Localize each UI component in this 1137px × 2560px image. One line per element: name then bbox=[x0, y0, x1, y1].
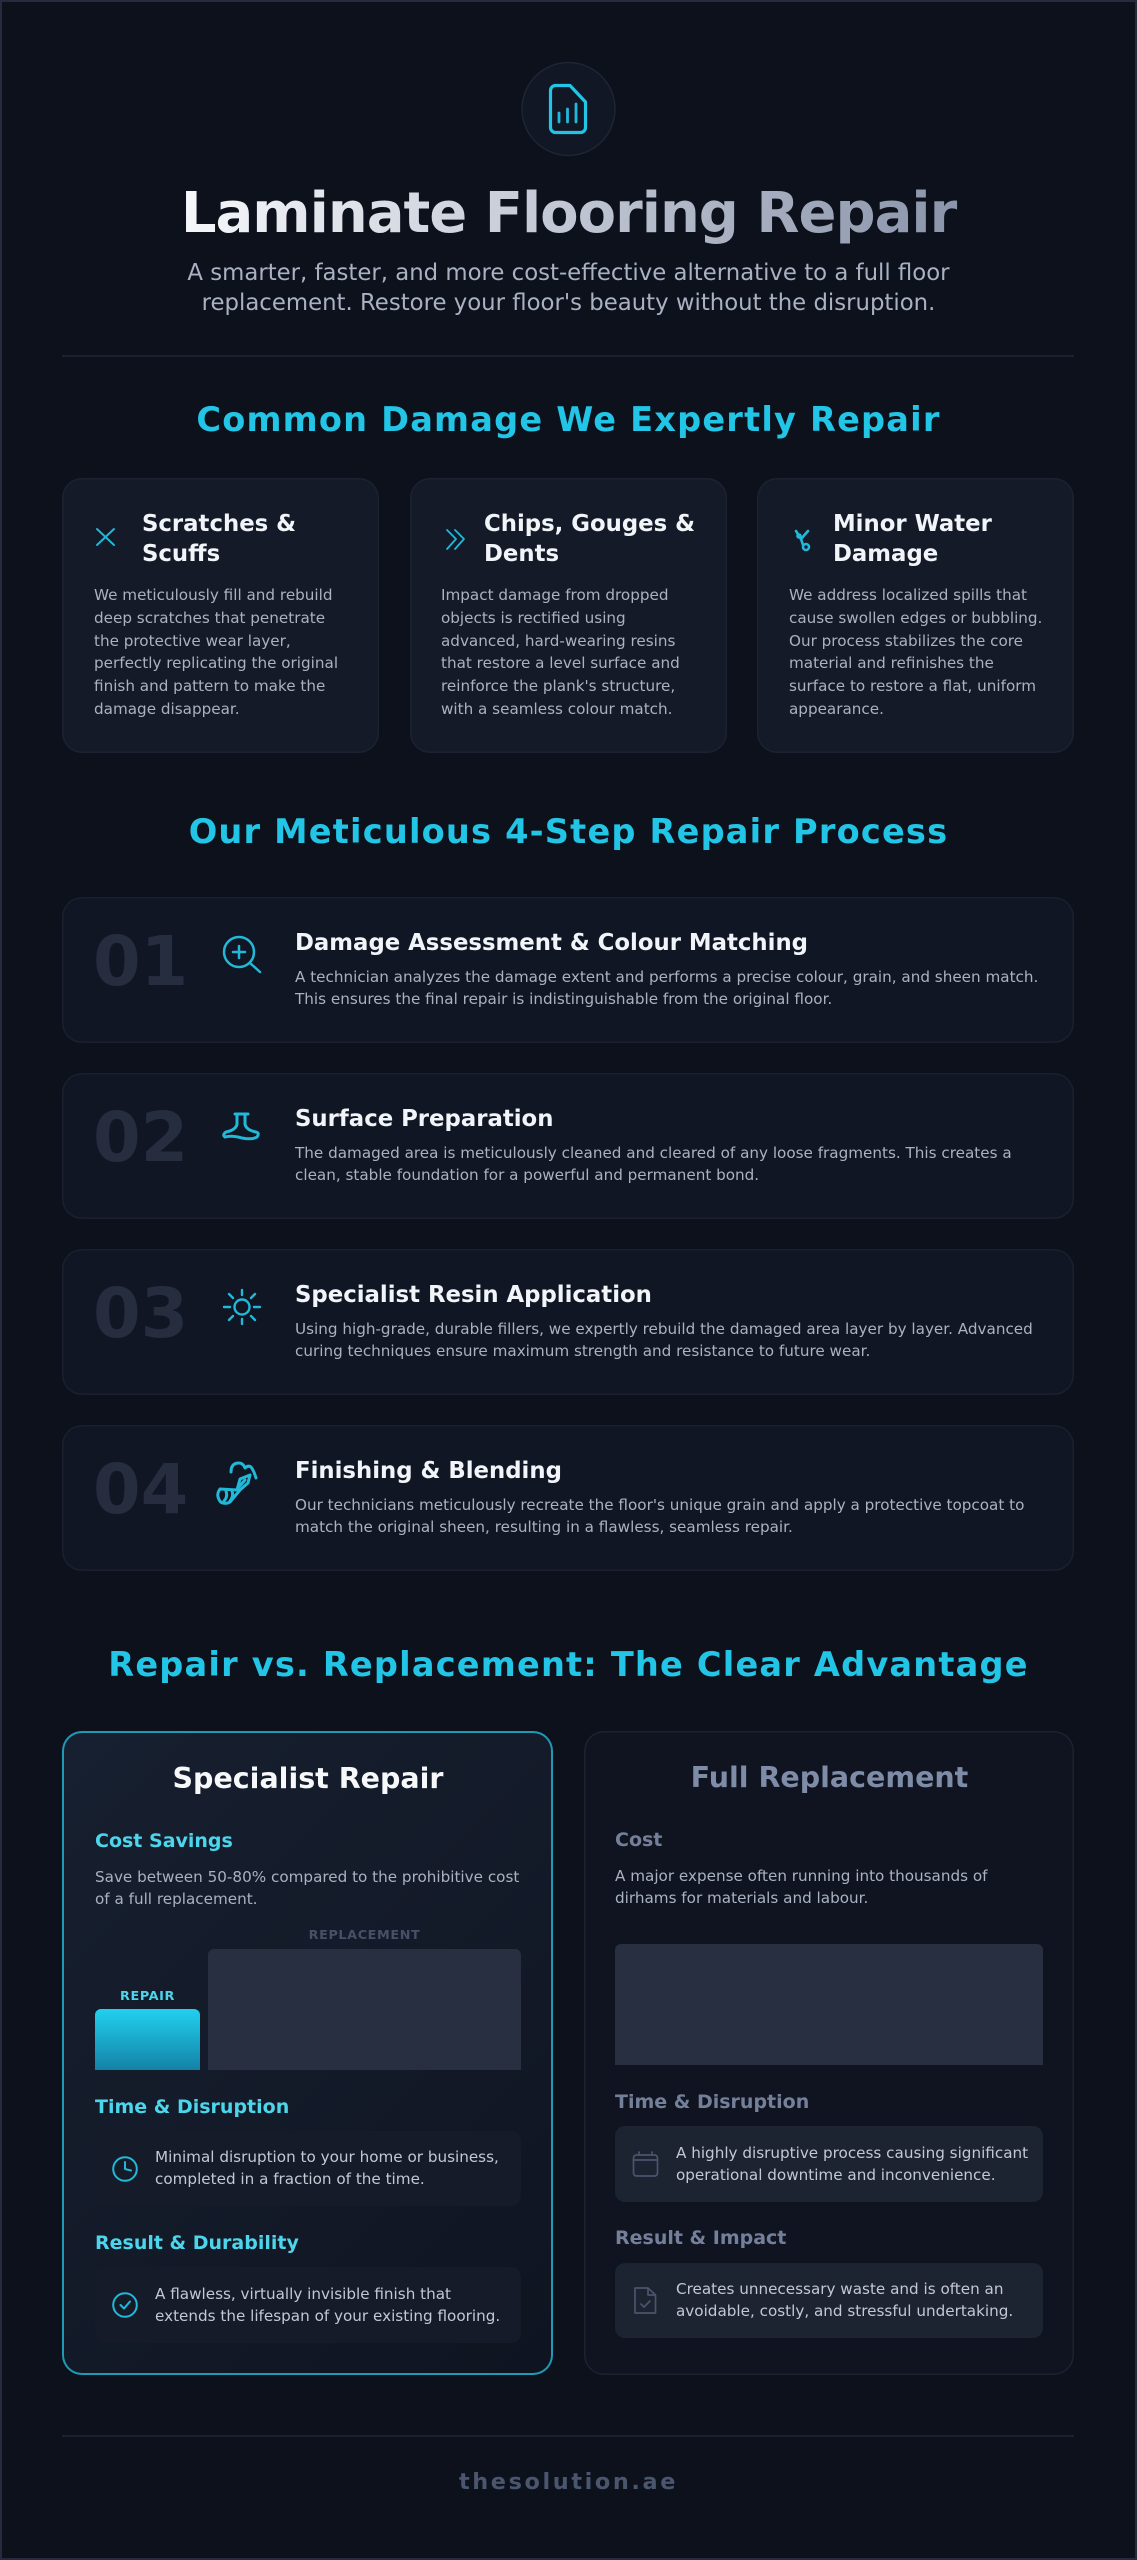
title bbox=[0, 181, 1137, 246]
cost text: A major expense often running into thousands of bbox=[615, 1867, 988, 1885]
card text: We address localized spills that bbox=[789, 586, 1027, 604]
card title: Dents bbox=[484, 541, 559, 567]
step text: Using high-grade, durable fillers, we expertly rebuild the damaged area layer by layer. Advanced bbox=[295, 1320, 1033, 1338]
subheading: time and disruption: Time & Disruption bbox=[95, 2096, 289, 2118]
icon: double chevron bbox=[446, 529, 465, 550]
card title: Scuffs bbox=[142, 541, 220, 567]
card text: We meticulously fill and rebuild bbox=[94, 586, 333, 604]
step text: A technician analyzes the damage extent and performs a precise colour, grain, and sheen match. bbox=[295, 968, 1038, 986]
step text bbox=[294, 1144, 1012, 1184]
panel title: Full Replacement bbox=[691, 1761, 968, 1794]
panel title: Specialist Repair bbox=[173, 1762, 443, 1795]
panel: step 2 bbox=[62, 1073, 1074, 1219]
subheading: time and disruption: Time & Disruption bbox=[615, 2091, 809, 2113]
card text: material and refinishes the bbox=[789, 654, 994, 672]
subheading: cost: Cost bbox=[615, 1829, 662, 1851]
step text bbox=[295, 1320, 1033, 1360]
panel: scratches and scuffs bbox=[62, 478, 379, 753]
card text: surface to restore a flat, uniform bbox=[789, 677, 1036, 695]
step number: 01 bbox=[93, 923, 188, 1002]
bar chart: repair vs replacement bbox=[95, 1928, 521, 2070]
card text: Impact damage from dropped bbox=[441, 586, 668, 604]
step title: Surface Preparation bbox=[295, 1106, 553, 1132]
step number: 03 bbox=[93, 1275, 188, 1354]
card title: Chips, Gouges & bbox=[484, 511, 695, 537]
heading: process: Our Meticulous 4-Step Repair Process bbox=[189, 812, 948, 851]
callout text bbox=[676, 2280, 1013, 2320]
subheading: result and impact: Result & Impact bbox=[615, 2227, 786, 2249]
callout: minimal disruption bbox=[95, 2131, 521, 2206]
card title: Minor Water bbox=[833, 511, 992, 537]
icon: check circle bbox=[112, 2292, 138, 2318]
footer: thesolution.ae bbox=[459, 2469, 678, 2495]
bar chart: repair vs replacement: REPAIR bbox=[120, 1989, 175, 2004]
step text: clean, stable foundation for a powerful and permanent bond. bbox=[295, 1166, 759, 1184]
cost text: Save between 50-80% compared to the prohibitive cost bbox=[95, 1868, 519, 1886]
icon: cross bbox=[96, 528, 115, 546]
heading: comparison: Repair vs. Replacement: The Clear Advantage bbox=[108, 1645, 1029, 1684]
card text: advanced, hard-wearing resins bbox=[441, 632, 675, 650]
callout text: Minimal disruption to your home or business, bbox=[155, 2148, 499, 2166]
panel: specialist repair bbox=[62, 1731, 553, 2375]
card text: with a seamless colour match. bbox=[441, 700, 672, 718]
card title bbox=[142, 511, 296, 567]
icon: clock bbox=[112, 2156, 138, 2182]
step title: Specialist Resin Application bbox=[295, 1282, 652, 1308]
panel: chips gouges dents bbox=[410, 478, 727, 753]
callout text: operational downtime and inconvenience. bbox=[676, 2166, 996, 2184]
step text: match the original sheen, resulting in a flawless, seamless repair. bbox=[295, 1518, 793, 1536]
step text: Our technicians meticulously recreate the floor's unique grain and apply a protective topcoat to bbox=[295, 1496, 1024, 1514]
step number: 04 bbox=[93, 1451, 188, 1530]
subtitle: replacement. Restore your floor's beauty without the disruption. bbox=[202, 290, 935, 316]
card title bbox=[833, 511, 992, 567]
step text bbox=[294, 968, 1038, 1008]
card text bbox=[789, 586, 1042, 718]
card text: the protective wear layer, bbox=[94, 632, 291, 650]
icon: file check bbox=[634, 2287, 656, 2314]
card text: appearance. bbox=[789, 700, 884, 718]
card text: objects is rectified using bbox=[441, 609, 626, 627]
card text: cause swollen edges or bubbling. bbox=[789, 609, 1042, 627]
step title: Finishing & Blending bbox=[295, 1458, 562, 1484]
callout text: A highly disruptive process causing significant bbox=[676, 2144, 1028, 2162]
callout: waste bbox=[615, 2263, 1043, 2338]
card title: Damage bbox=[833, 541, 938, 567]
icon: magnifier bbox=[222, 936, 262, 974]
subtitle: A smarter, faster, and more cost-effective alternative to a full floor bbox=[187, 260, 950, 286]
callout text: completed in a fraction of the time. bbox=[155, 2170, 425, 2188]
panel: step 4 bbox=[62, 1425, 1074, 1571]
subheading: cost savings: Cost Savings bbox=[95, 1830, 233, 1852]
card text: deep scratches that penetrate bbox=[94, 609, 325, 627]
title: Laminate Flooring Repair bbox=[181, 181, 956, 246]
icon: water valve bbox=[794, 530, 810, 552]
callout text: A flawless, virtually invisible finish that bbox=[155, 2285, 451, 2303]
card text bbox=[94, 586, 338, 718]
callout text: Creates unnecessary waste and is often an bbox=[676, 2280, 1004, 2298]
callout: flawless finish bbox=[95, 2267, 521, 2343]
icon: sun bbox=[222, 1288, 262, 1326]
card text: perfectly replicating the original bbox=[94, 654, 338, 672]
callout text: avoidable, costly, and stressful undertaking. bbox=[676, 2302, 1013, 2320]
cost text bbox=[95, 1868, 519, 1908]
cost text bbox=[615, 1867, 988, 1907]
icon: feather brush bbox=[216, 1462, 258, 1505]
callout text bbox=[155, 2285, 500, 2325]
panel: full replacement bbox=[584, 1731, 1074, 2375]
subtitle bbox=[187, 260, 950, 316]
icon: calendar bbox=[632, 2151, 658, 2177]
card text: damage disappear. bbox=[94, 700, 240, 718]
panel: minor water damage bbox=[757, 478, 1074, 753]
card title: Scratches & bbox=[142, 511, 296, 537]
cost text: of a full replacement. bbox=[95, 1890, 258, 1908]
bar: replacement cost bbox=[615, 1944, 1043, 2065]
callout text bbox=[155, 2148, 499, 2188]
subheading: result and durability: Result & Durability bbox=[95, 2232, 299, 2254]
step text bbox=[295, 1496, 1024, 1536]
icon: document with bar chart bbox=[521, 62, 616, 156]
card text: finish and pattern to make the bbox=[94, 677, 325, 695]
step text: curing techniques ensure maximum strength and resistance to future wear. bbox=[295, 1342, 870, 1360]
card text bbox=[441, 586, 680, 718]
bar chart: repair vs replacement: REPLACEMENT bbox=[309, 1928, 420, 1943]
card title bbox=[484, 511, 695, 567]
step number: 02 bbox=[93, 1099, 188, 1178]
callout: highly disruptive bbox=[615, 2126, 1043, 2202]
callout text bbox=[676, 2144, 1028, 2184]
card text: that restore a level surface and bbox=[441, 654, 680, 672]
step text: This ensures the final repair is indistinguishable from the original floor. bbox=[295, 990, 832, 1008]
heading: common damage: Common Damage We Expertly Repair bbox=[196, 400, 941, 439]
cost text: dirhams for materials and labour. bbox=[615, 1889, 868, 1907]
step text: The damaged area is meticulously cleaned and cleared of any loose fragments. This creates a bbox=[295, 1144, 1012, 1162]
icon: flask bbox=[222, 1112, 260, 1140]
panel: step 1 bbox=[62, 897, 1074, 1043]
card text: reinforce the plank's structure, bbox=[441, 677, 675, 695]
card text: Our process stabilizes the core bbox=[789, 632, 1023, 650]
panel: step 3 bbox=[62, 1249, 1074, 1395]
callout text: extends the lifespan of your existing flooring. bbox=[155, 2307, 500, 2325]
step title: Damage Assessment & Colour Matching bbox=[295, 930, 808, 956]
